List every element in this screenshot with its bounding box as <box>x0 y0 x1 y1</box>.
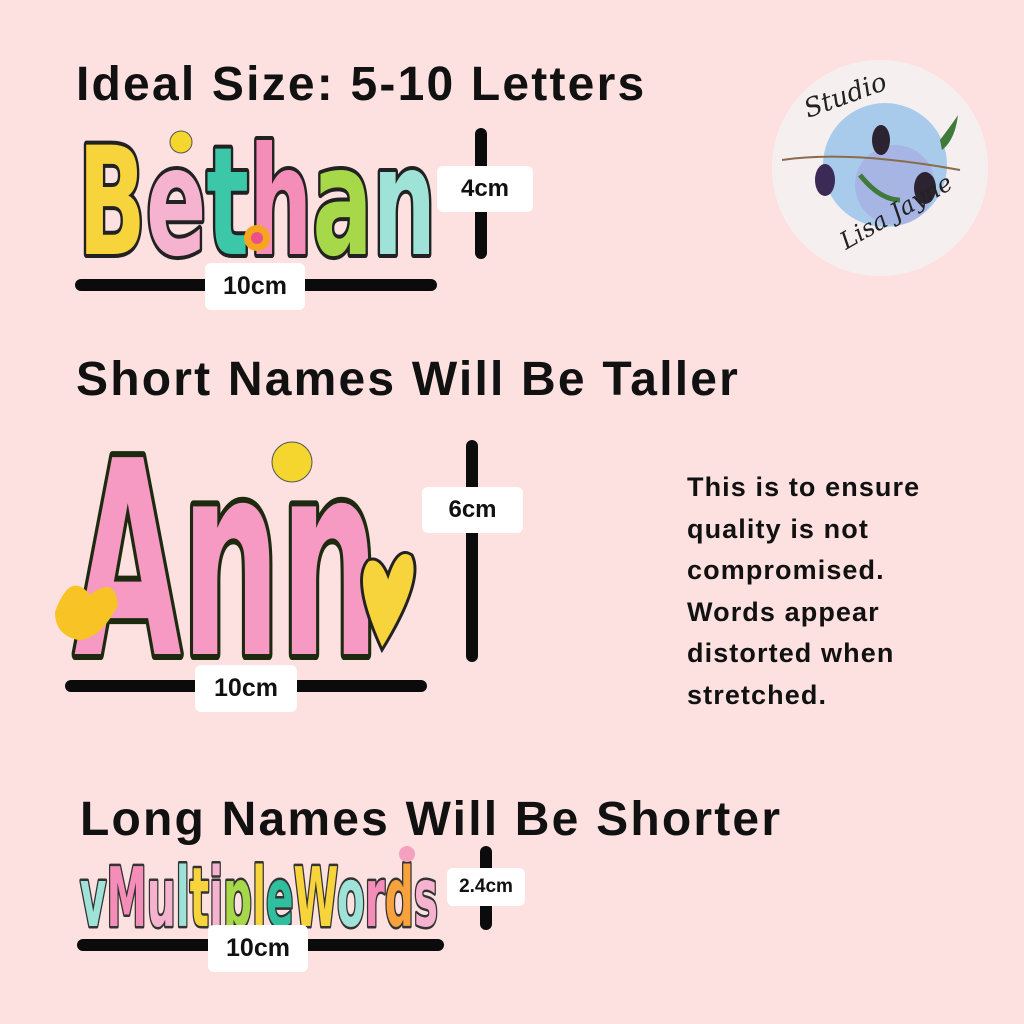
label: 10cm: 10cm <box>214 674 278 702</box>
title: ideal size: Ideal Size: 5-10 Letters <box>76 58 646 111</box>
text block: explanation <box>687 472 920 710</box>
title: long names: Long Names Will Be Shorter <box>80 793 782 846</box>
label: 10cm: 10cm <box>226 934 290 962</box>
title: short names: Short Names Will Be Taller <box>76 353 740 406</box>
label: 6cm: 6cm <box>448 496 497 523</box>
label: 10cm <box>195 665 297 712</box>
logo: Studio Lisa Jayne: Lisa Jayne <box>834 168 957 256</box>
label: 4cm <box>437 166 533 212</box>
label: 2.4cm: 2.4cm <box>459 876 513 897</box>
label: 10cm: 10cm <box>223 272 287 300</box>
label: 6cm <box>422 487 523 533</box>
text block: explanation: Words appear <box>687 596 880 626</box>
label: 10cm <box>208 925 308 972</box>
text block: explanation: distorted when <box>687 638 894 668</box>
text block: explanation: This is to ensure <box>687 472 920 502</box>
label: 10cm <box>205 263 305 310</box>
text block: explanation: stretched. <box>687 680 827 710</box>
bar: vertical 6cm <box>466 440 478 662</box>
word art: Bethan: Bethan <box>78 116 436 290</box>
word art: MultipleWords: vMultipleWords <box>80 851 438 946</box>
label: 4cm: 4cm <box>461 175 509 202</box>
bar: vertical 2.4cm <box>480 846 492 930</box>
logo: Studio Lisa Jayne: Studio <box>800 67 891 125</box>
bar: horizontal 10cm <box>77 939 444 951</box>
text block: explanation: compromised. <box>687 555 885 585</box>
word art: Ann: Ann <box>74 403 379 718</box>
bar: horizontal 10cm <box>75 279 437 291</box>
bar: vertical 4cm <box>475 128 487 259</box>
label: 2.4cm <box>447 868 525 906</box>
bar: horizontal 10cm <box>65 680 427 692</box>
text block: explanation: quality is not <box>687 514 869 544</box>
